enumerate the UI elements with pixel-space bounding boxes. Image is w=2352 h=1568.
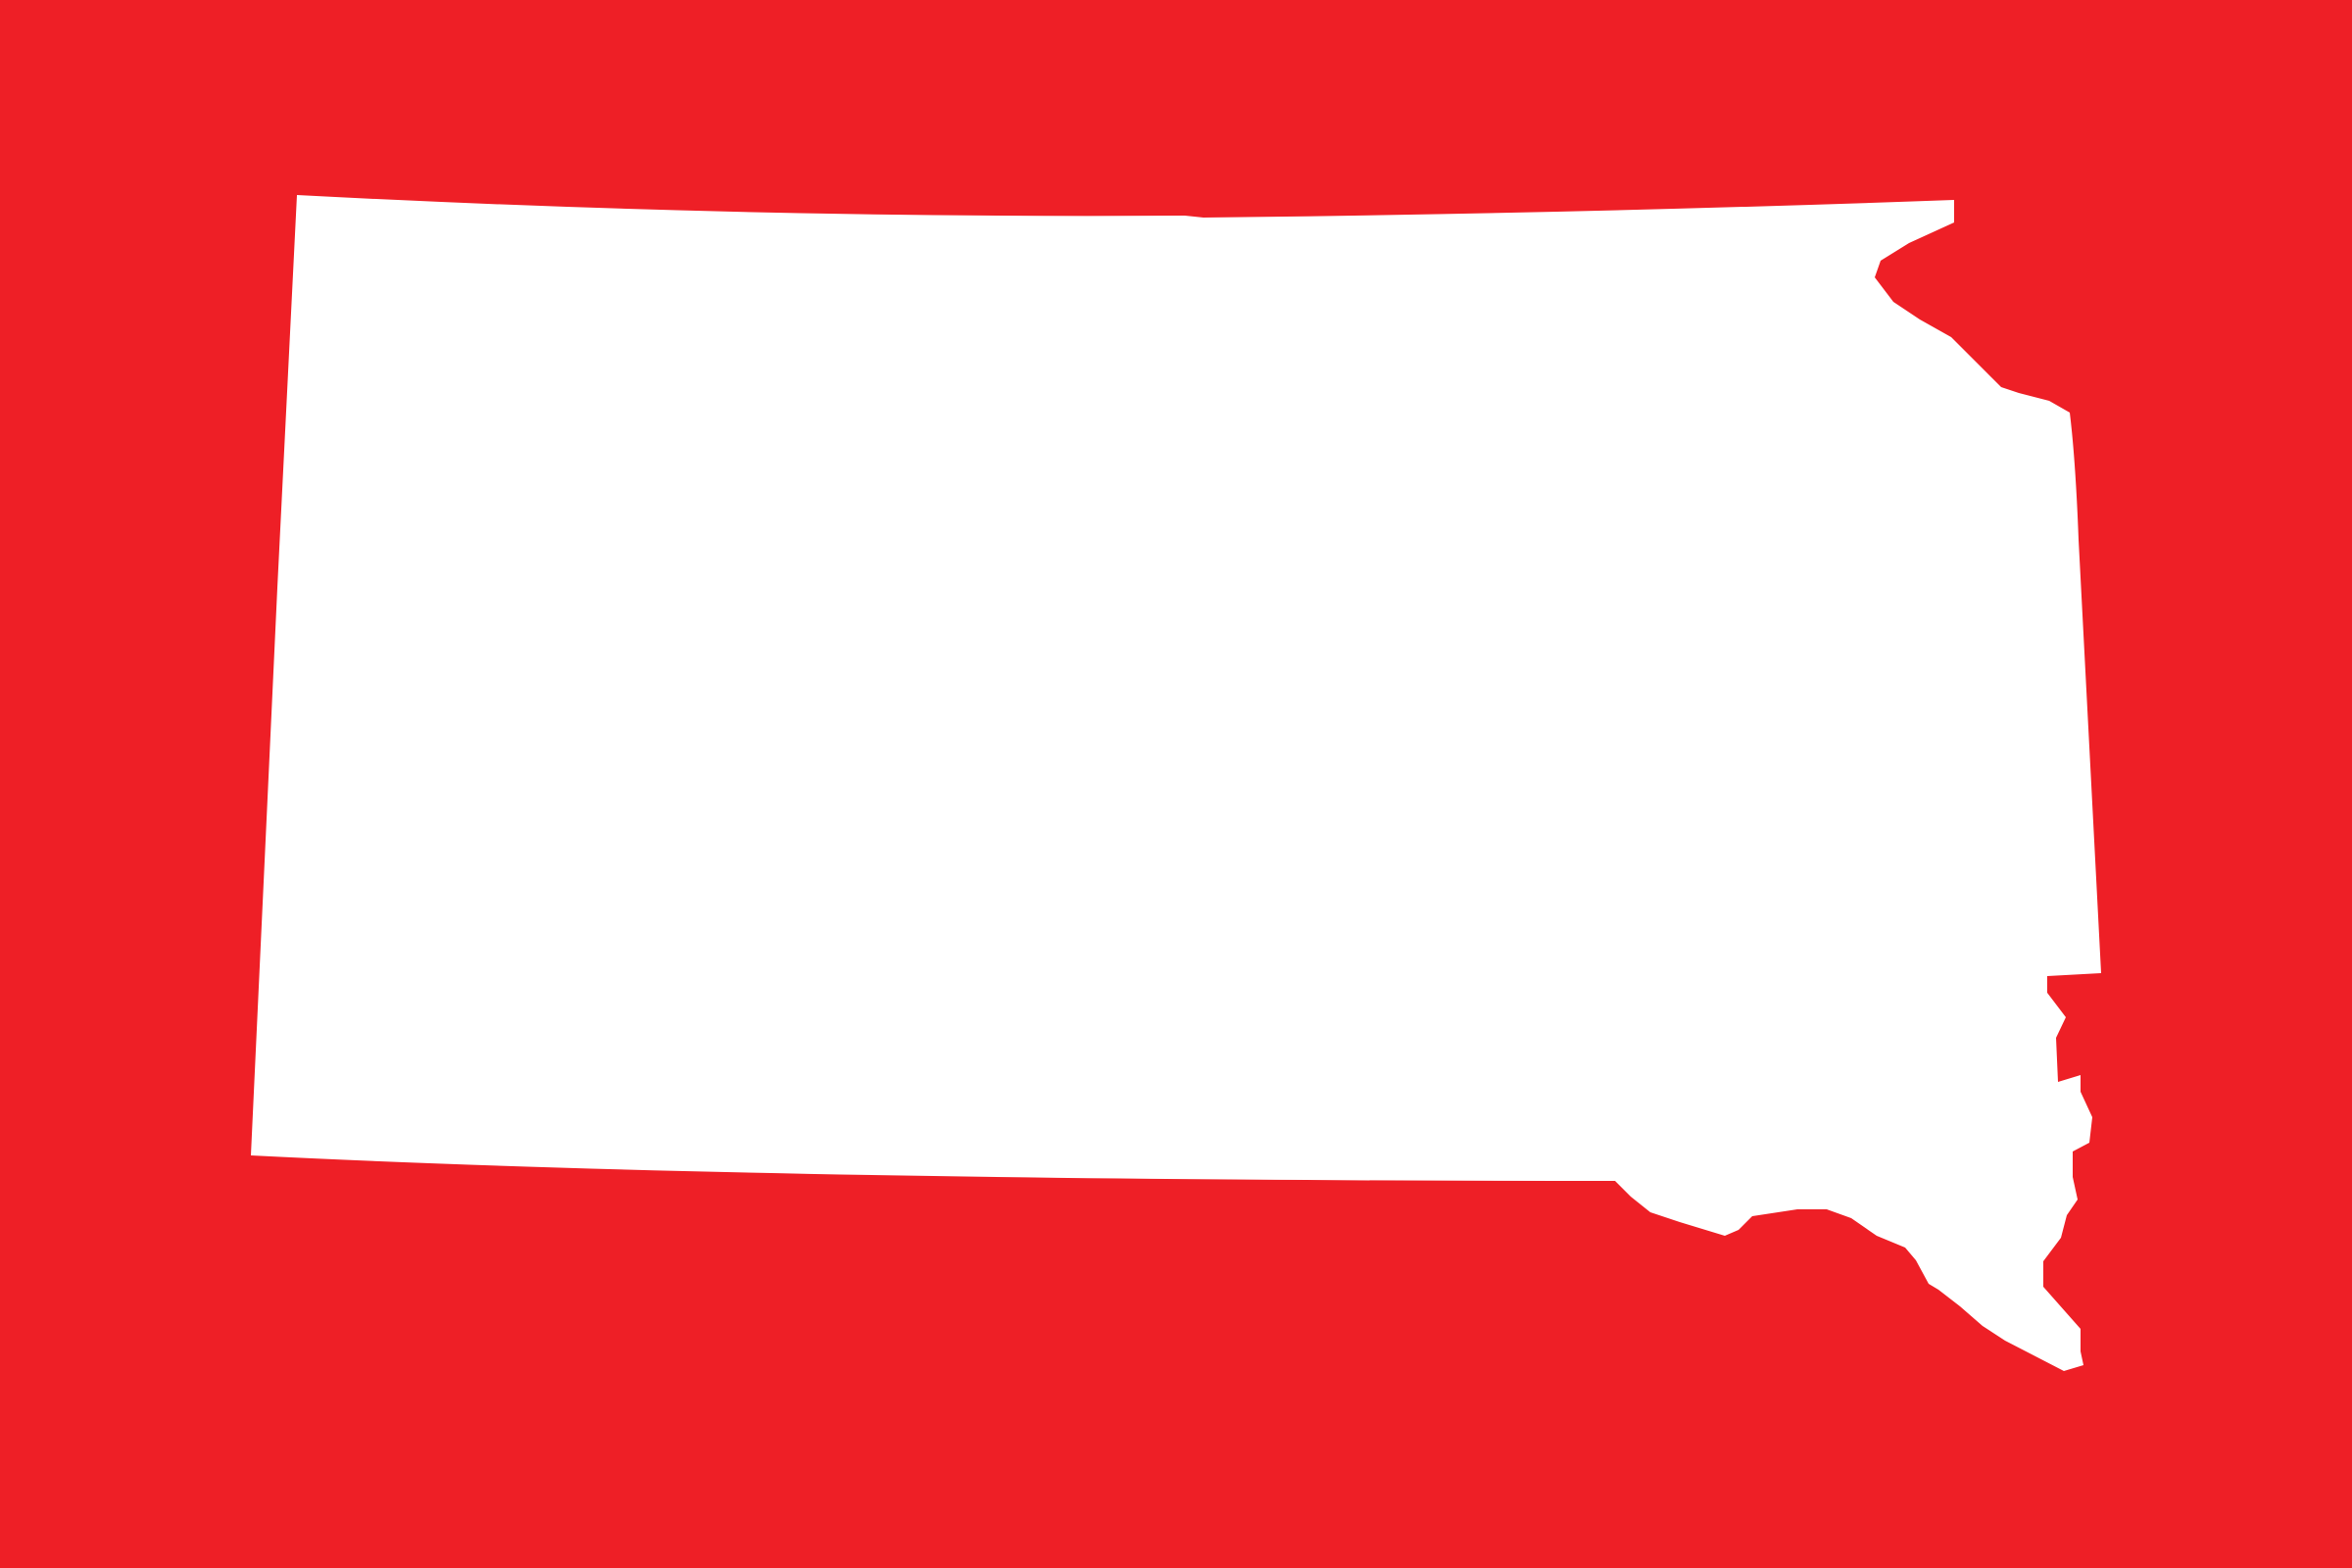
state shape (251, 195, 2101, 1371)
